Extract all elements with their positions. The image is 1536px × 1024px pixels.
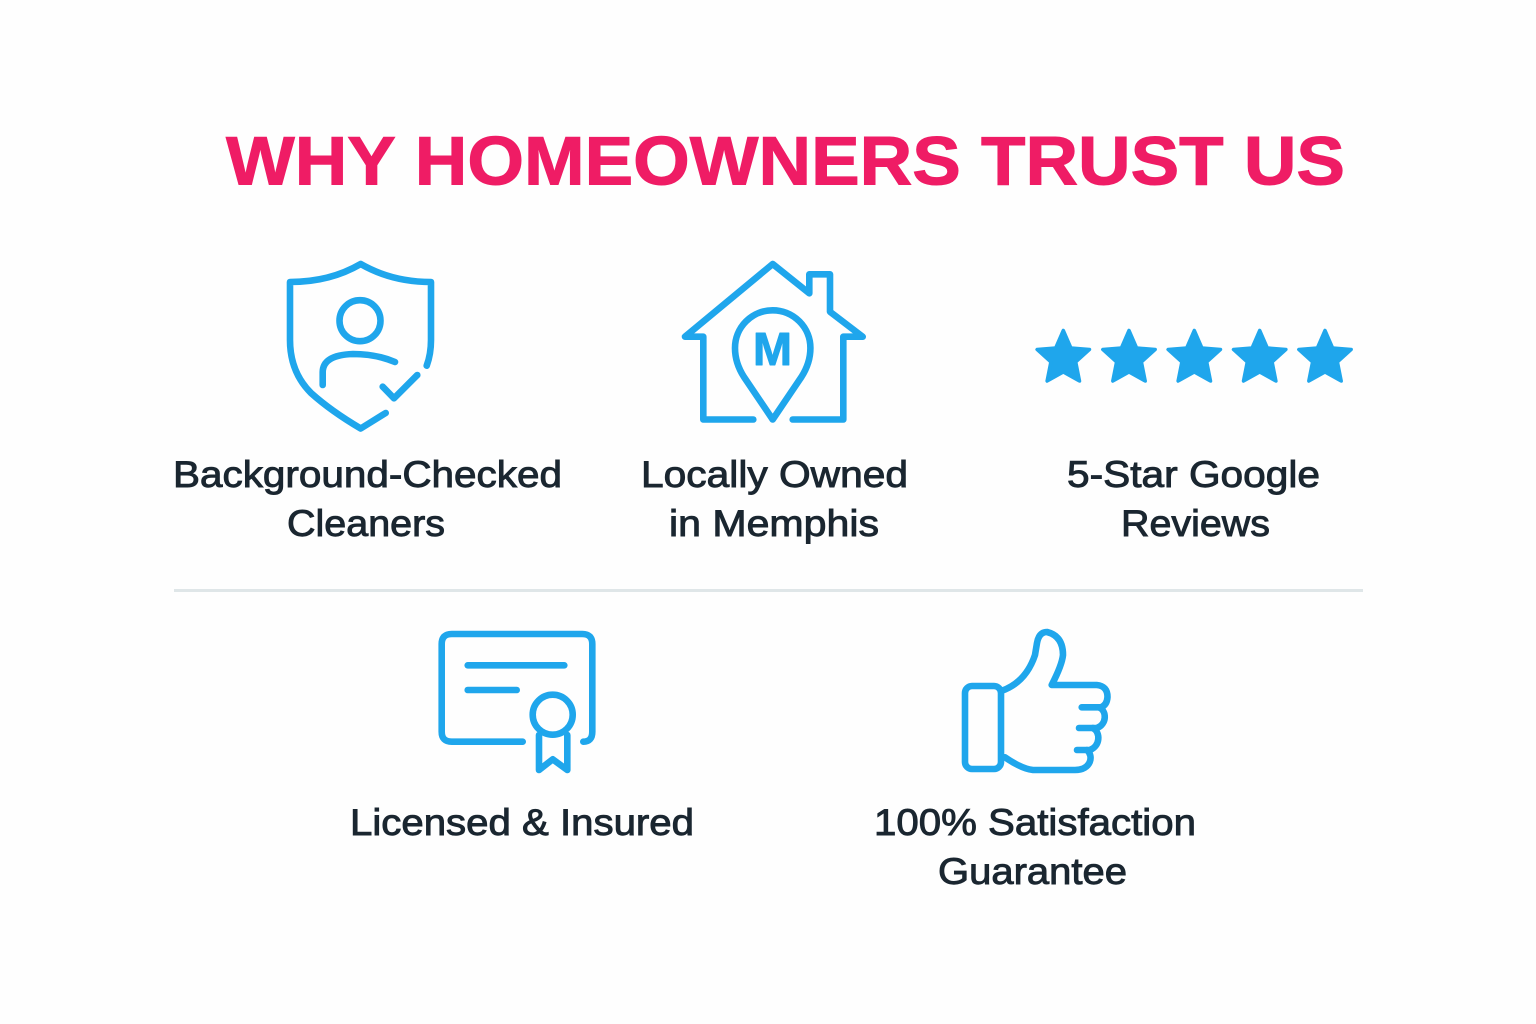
- label: locally owned in memphis: Locally Owned: [641, 454, 908, 495]
- icon: shield with person and checkmark: [290, 264, 431, 428]
- item: background-checked cleaners: [173, 264, 562, 544]
- label: licensed and insured: Licensed & Insured: [350, 802, 694, 843]
- icon: certificate with ribbon: [442, 634, 592, 770]
- icon letter: M: M: [753, 323, 792, 375]
- label: locally owned in memphis: in Memphis: [669, 503, 879, 544]
- icon: five stars: [1037, 330, 1351, 381]
- label: 100% satisfaction guarantee: Guarantee: [938, 851, 1127, 892]
- label: 5-star google reviews: 5-Star Google: [1067, 454, 1320, 495]
- label: background-checked cleaners: Cleaners: [287, 503, 445, 544]
- label: background-checked cleaners: Background-Checked: [173, 454, 562, 495]
- item: locally owned: [641, 264, 908, 544]
- item: licensed and insured: [350, 634, 694, 843]
- item: satisfaction guarantee: [874, 632, 1196, 892]
- title: WHY HOMEOWNERS TRUST US: [226, 122, 1345, 200]
- label: 5-star google reviews: Reviews: [1121, 503, 1270, 544]
- icon: thumbs up: [965, 632, 1108, 770]
- label: 100% satisfaction guarantee: 100% Satisfaction: [874, 802, 1196, 843]
- item: five star reviews: [1037, 330, 1351, 544]
- icon: house with map pin: [685, 264, 863, 420]
